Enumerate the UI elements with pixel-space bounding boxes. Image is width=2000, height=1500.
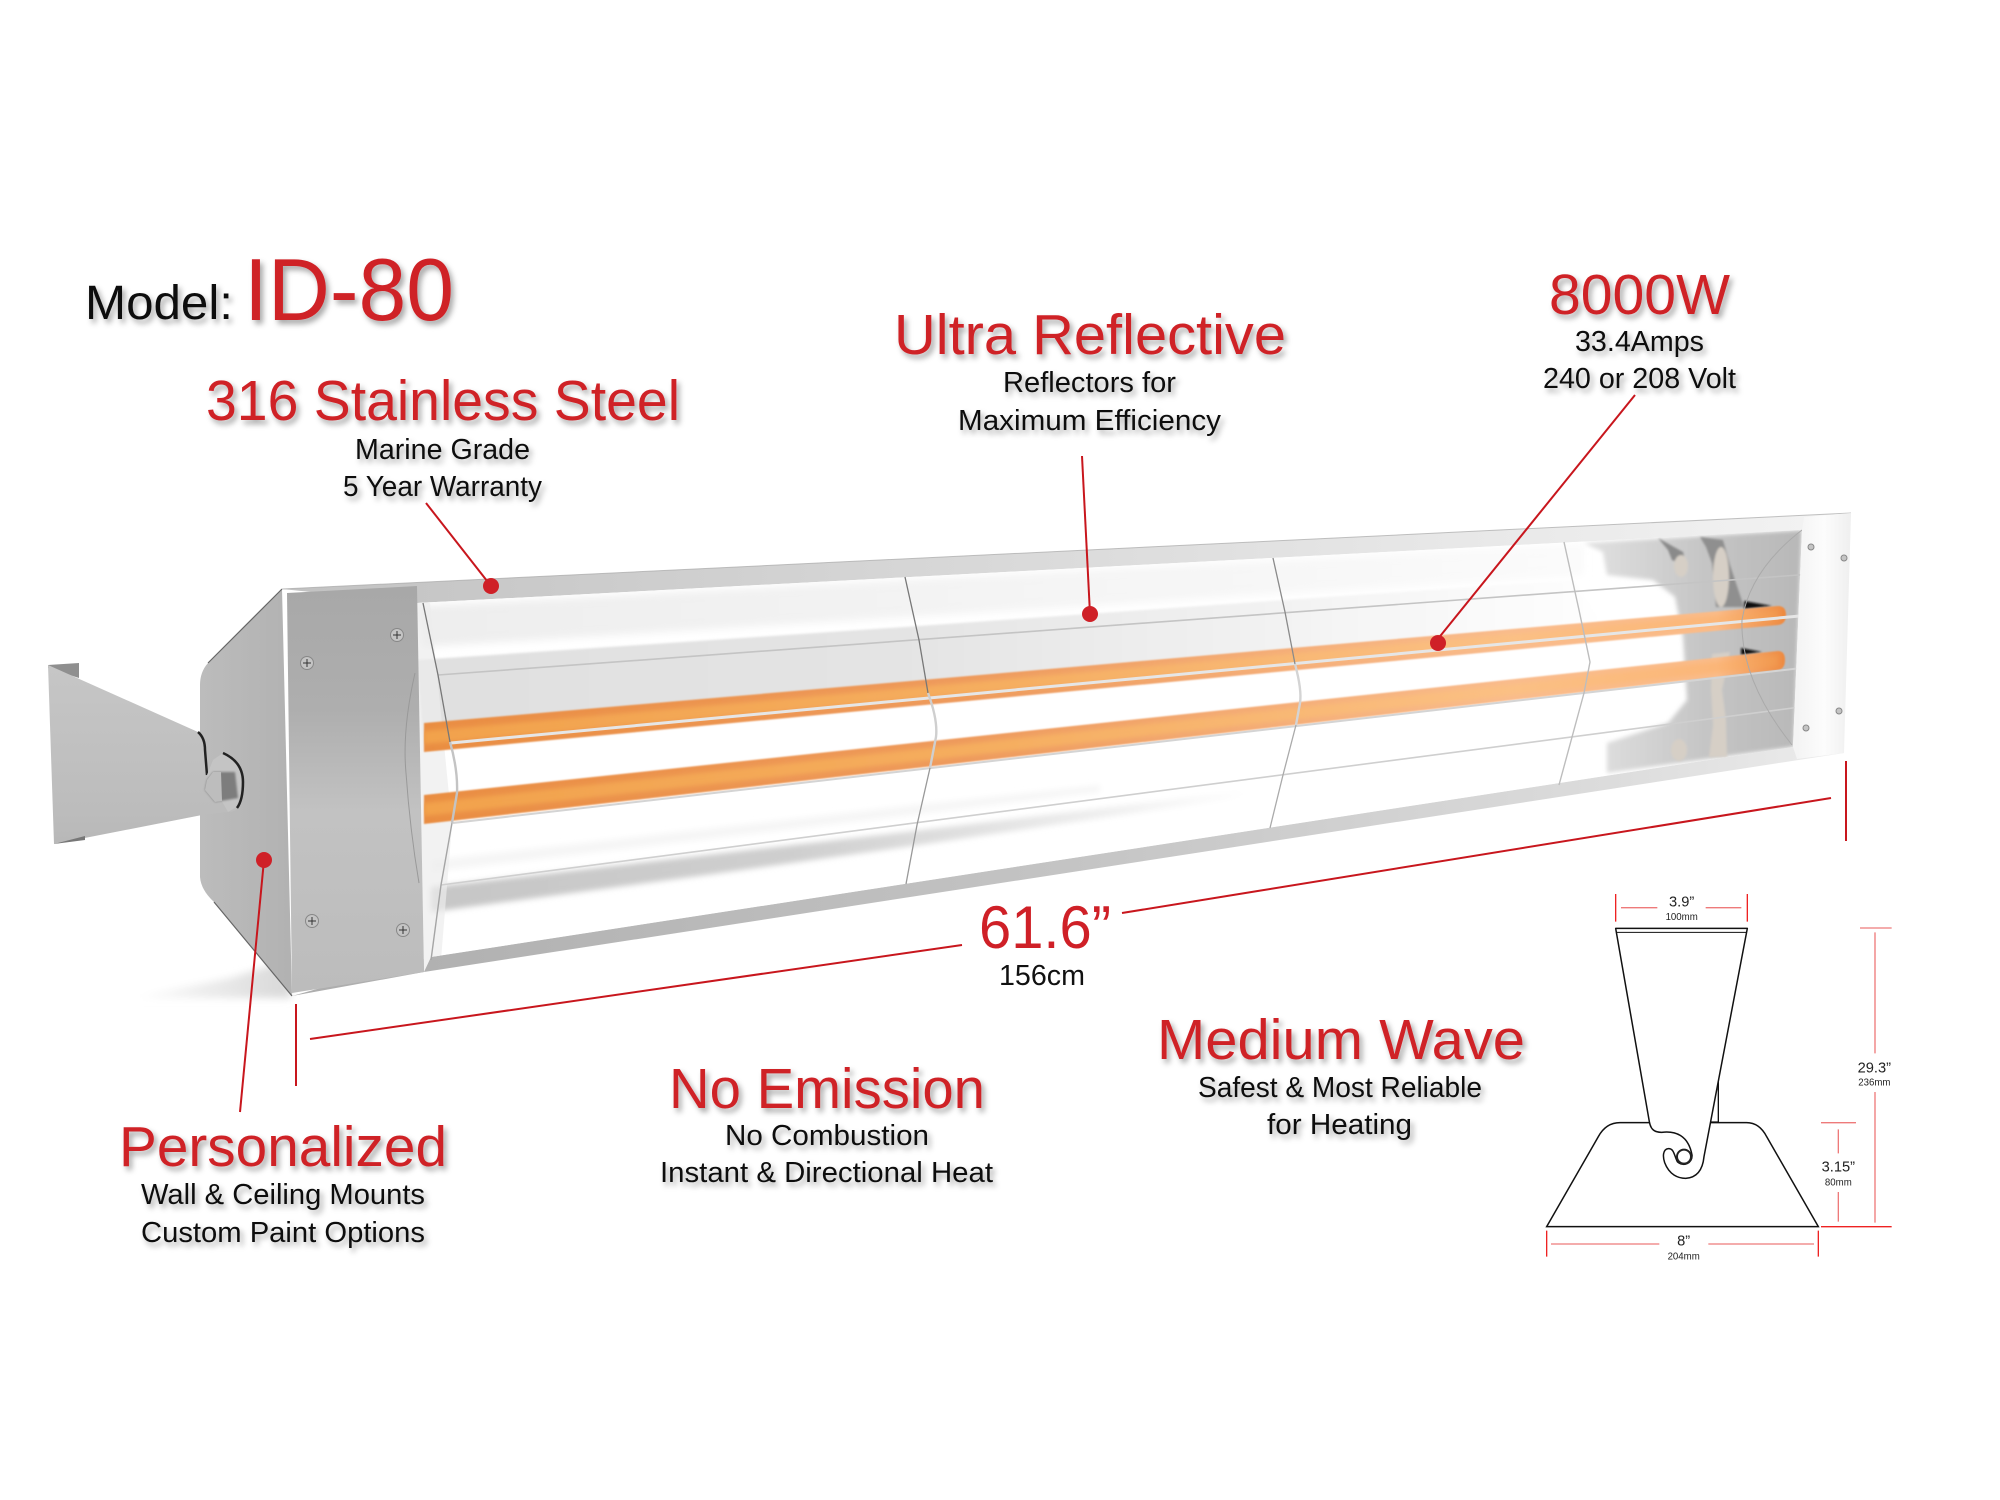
left end shade (417, 603, 452, 972)
washer and bolt (205, 753, 243, 812)
length value: 156cm (999, 960, 1085, 992)
dimension labels: 3.15” (1822, 1160, 1855, 1176)
leader: personalized (240, 852, 272, 1112)
feature: personalized: Custom Paint Options (141, 1217, 425, 1249)
upper reflector shade (418, 594, 1400, 722)
dimension labels: 29.3” (1858, 1060, 1891, 1076)
lower reflector shade (431, 804, 1162, 913)
feature: no emission (660, 1057, 993, 1189)
feature: ultra reflective (894, 303, 1286, 437)
feature: wattage: 33.4Amps (1575, 326, 1704, 358)
top rail (282, 513, 1851, 603)
dimension labels (1666, 895, 1891, 1262)
leader: stainless steel (426, 503, 499, 594)
feature: ultra reflective: Ultra Reflective (894, 303, 1286, 367)
leader: wattage (1430, 395, 1635, 651)
feature: wattage: 8000W (1549, 263, 1730, 327)
heating tube upper (424, 606, 1786, 752)
pivot bolt (1677, 1150, 1691, 1164)
feature: personalized (119, 1115, 447, 1249)
feature: medium wave: Medium Wave (1157, 1008, 1525, 1072)
dimension labels: 236mm (1858, 1078, 1890, 1089)
dimension labels: 100mm (1666, 912, 1698, 923)
title: model (85, 240, 454, 339)
feature: wattage: 240 or 208 Volt (1543, 363, 1736, 395)
length value (979, 894, 1111, 992)
screws (300, 544, 1847, 936)
feature: medium wave (1157, 1008, 1525, 1141)
side profile dimension drawing (1547, 894, 1892, 1262)
heating tube lower (424, 651, 1785, 824)
dimension labels: 3.9” (1669, 895, 1694, 911)
heater product illustration (48, 513, 1851, 998)
dimension lines (1547, 894, 1892, 1257)
floor shadow (130, 962, 292, 998)
callout leader lines and dots (240, 395, 1635, 1112)
side panel (200, 589, 292, 996)
feature: personalized: Personalized (119, 1115, 447, 1179)
bracket back flange (48, 663, 79, 678)
feature: stainless steel: 316 Stainless Steel (206, 369, 680, 433)
feature: stainless steel: 5 Year Warranty (343, 471, 542, 503)
overall length dimension (296, 761, 1846, 1086)
dimension labels: 204mm (1668, 1251, 1700, 1262)
feature: medium wave: for Heating (1267, 1109, 1412, 1141)
guard wires (423, 530, 1821, 960)
support stub (1710, 1080, 1718, 1122)
feature: stainless steel: Marine Grade (355, 434, 530, 466)
right end cap recess (1584, 530, 1802, 773)
face plate wavy guard line (405, 673, 419, 883)
face plate (287, 586, 424, 993)
feature: ultra reflective: Maximum Efficiency (958, 405, 1222, 437)
title: model: ID-80 (244, 240, 454, 339)
feature: wattage (1543, 263, 1736, 395)
feature: no emission: No Emission (669, 1057, 985, 1121)
dimension labels: 80mm (1825, 1177, 1852, 1188)
length value: 61.6” (979, 894, 1111, 961)
title: model: Model: (85, 277, 233, 330)
reflector window (410, 530, 1802, 972)
feature: no emission: No Combustion (725, 1120, 929, 1152)
bottom rail (292, 747, 1844, 996)
leader: reflective (1082, 456, 1098, 622)
base outline (1547, 1123, 1818, 1227)
wedge and hook (1616, 928, 1747, 1178)
feature: personalized: Wall & Ceiling Mounts (141, 1179, 425, 1211)
right end plate (1793, 513, 1851, 759)
feature: stainless steel (206, 369, 680, 503)
upper light strip (430, 569, 1254, 646)
dimension labels: 8” (1677, 1234, 1690, 1250)
feature: no emission: Instant & Directional Heat (660, 1157, 993, 1189)
ceramic supports (1658, 537, 1772, 761)
feature: ultra reflective: Reflectors for (1003, 367, 1176, 399)
mounting bracket (48, 665, 240, 844)
feature: medium wave: Safest & Most Reliable (1198, 1072, 1482, 1104)
